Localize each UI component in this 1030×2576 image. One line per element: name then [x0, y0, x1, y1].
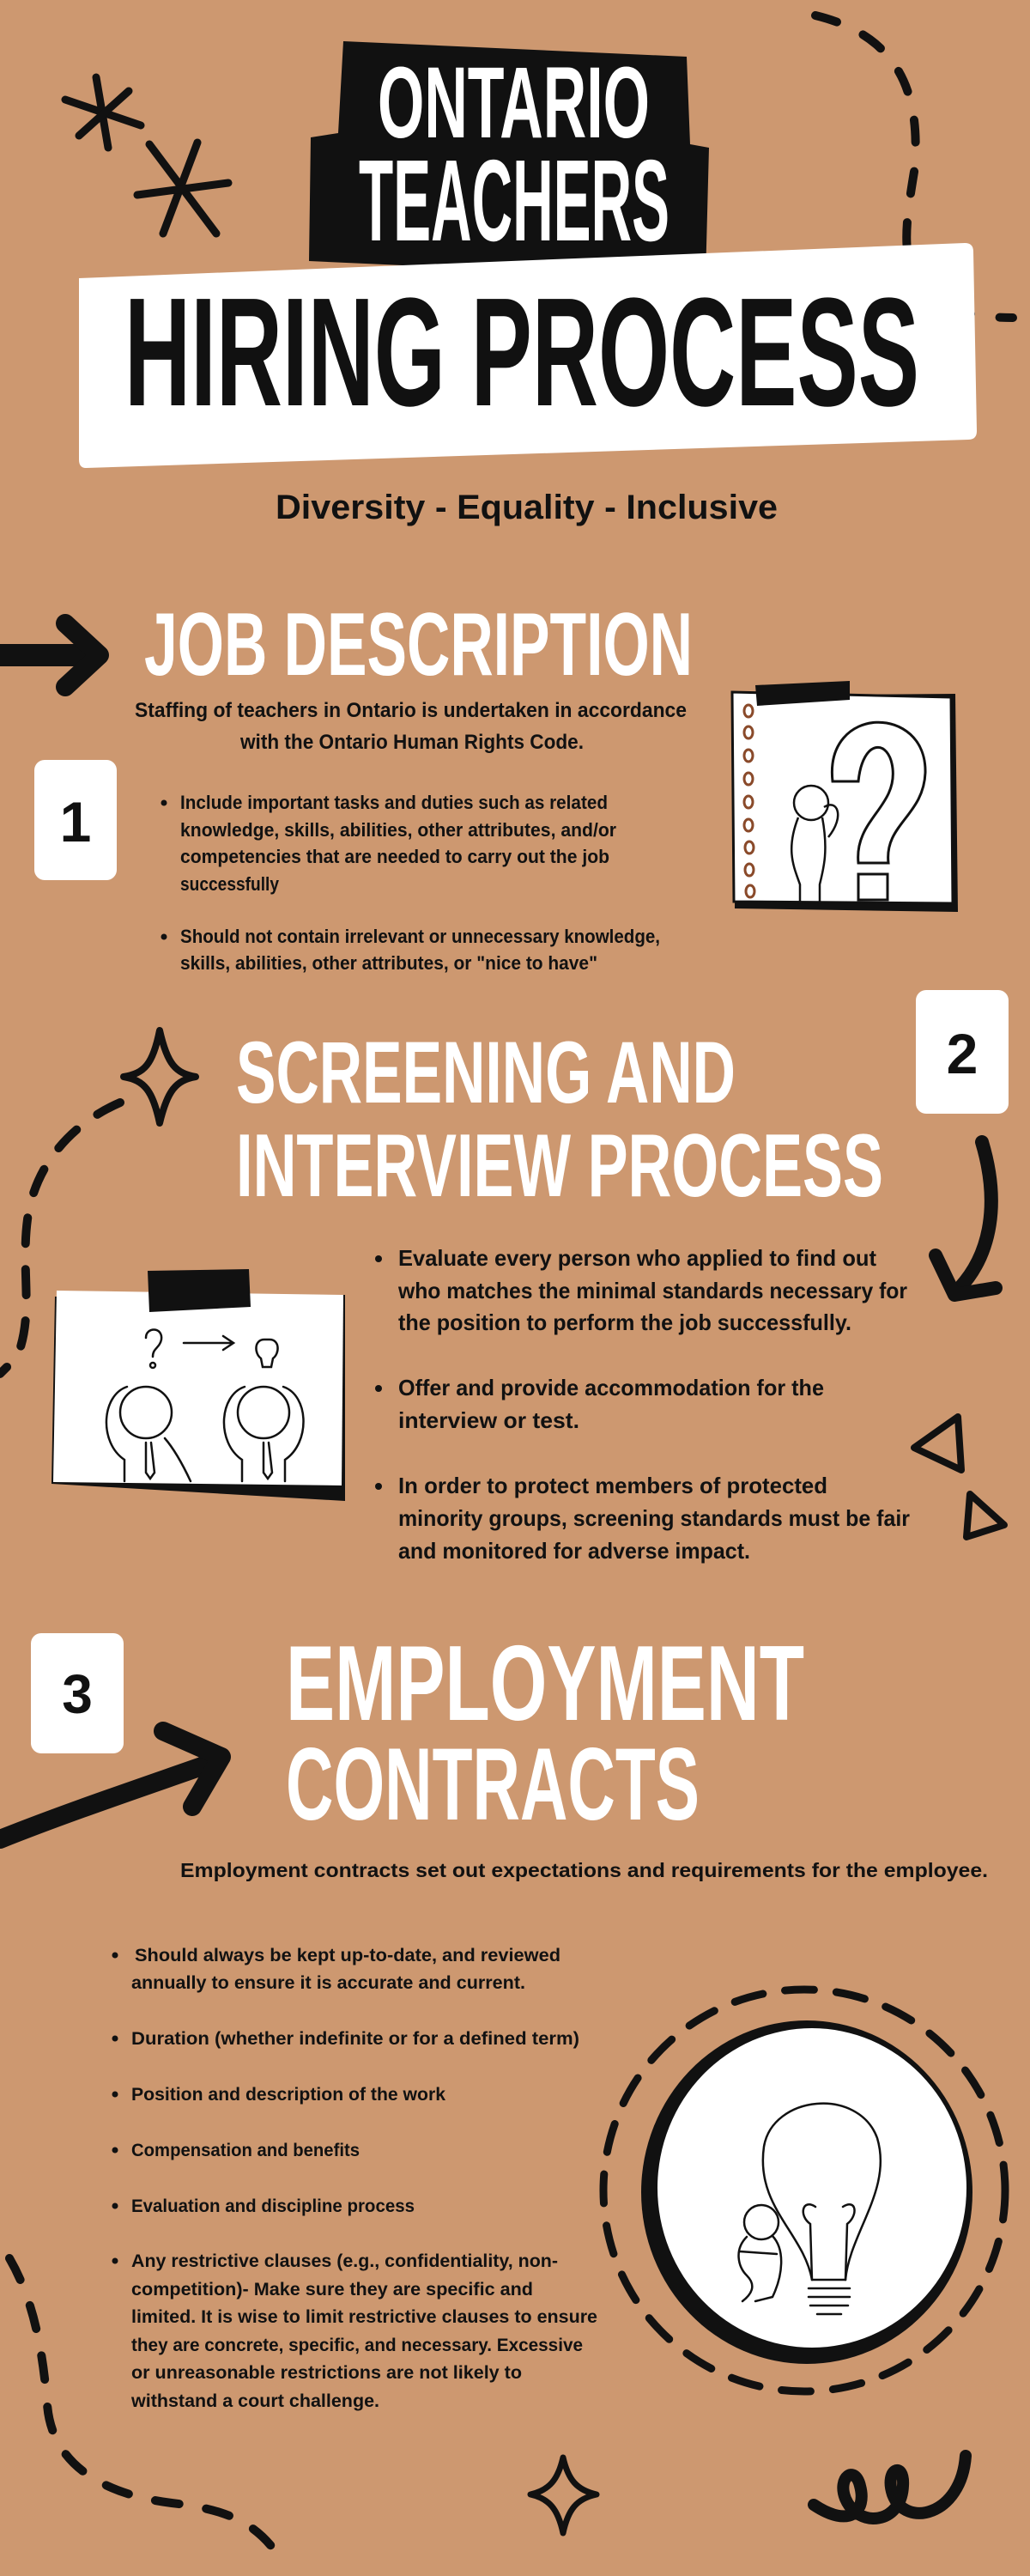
- heading: employment contracts: [286, 1625, 804, 1842]
- heading: employment contracts: EMPLOYMENT: [286, 1625, 804, 1743]
- bullets: section 3: Position and description of the work: [131, 2085, 445, 2105]
- text block: section 1 intro: Staffing of teachers in Ontario is undertaken in accordance: [135, 699, 687, 722]
- bullets: section 1: knowledge, skills, abilities, other attributes, and/or: [180, 819, 616, 841]
- number box 2: [916, 990, 1009, 1114]
- heading: job description: JOB DESCRIPTION: [144, 595, 693, 695]
- icon: light bulb circle: [603, 1990, 1005, 2391]
- bullets: section 2: Evaluate every person who applied to find out: [398, 1245, 876, 1271]
- bullets: section 2: Offer and provide accommodation for the: [398, 1375, 824, 1400]
- icon: sparkle bottom: [530, 2458, 597, 2533]
- number box 3: 3: [62, 1663, 93, 1725]
- bullets: section 3: Any restrictive clauses (e.g., confidentiality, non-: [131, 2251, 558, 2271]
- dashed curve top right: [815, 15, 1013, 318]
- icon: asterisk top left: [65, 77, 141, 148]
- number box 2: 2: [947, 1022, 978, 1085]
- bullets: section 3: Should always be kept up-to-date, and reviewed: [135, 1946, 560, 1965]
- icon: asterisk second: [137, 143, 228, 234]
- icon: notepad with question mark: [732, 681, 958, 912]
- bullets: section 3: limited. It is wise to limit restrictive clauses to ensure: [131, 2307, 597, 2327]
- bullets: section 2: minority groups, screening standards must be fair: [398, 1505, 910, 1531]
- heading: screening and interview process: SCREENING AND: [236, 1024, 736, 1121]
- bullets: section 1: skills, abilities, other attributes, or "nice to have": [180, 952, 597, 974]
- subtitle: Diversity - Equality - Inclusive: [276, 489, 778, 526]
- bullets: section 3: they are concrete, specific, and necessary. Excessive: [131, 2336, 583, 2355]
- icon: squiggle bottom right: [814, 2456, 966, 2518]
- bullets: section 2: In order to protect members of protected: [398, 1473, 827, 1498]
- dashed curve left section 2: [0, 1103, 120, 1374]
- bullets: section 1: competencies that are needed to carry out the job: [180, 846, 609, 867]
- title: black box ONTARIO TEACHERS: TEACHERS: [359, 136, 670, 265]
- bullets: section 1: successfully: [180, 873, 280, 895]
- bullets: section 2: interview or test.: [398, 1407, 579, 1433]
- bullets: section 3: Evaluation and discipline process: [131, 2196, 415, 2216]
- bullets: section 2: and monitored for adverse impact.: [398, 1538, 750, 1564]
- bullets: section 3: Compensation and benefits: [131, 2141, 360, 2160]
- arrow: curved down section 2: [936, 1142, 996, 1295]
- text block: section 1 intro: [135, 699, 687, 754]
- bullets: section 3: or unreasonable restrictions are not likely to: [131, 2363, 522, 2383]
- arrow: section 3: [0, 1731, 221, 1839]
- number box 1: 1: [60, 790, 91, 854]
- bullets: section 1: [161, 792, 660, 974]
- bullets: section 3: annually to ensure it is accurate and current.: [131, 1973, 525, 1993]
- arrow: section 1: [0, 623, 100, 687]
- bullets: section 3: withstand a court challenge.: [130, 2391, 379, 2411]
- bullets: section 2: who matches the minimal standards necessary for: [397, 1278, 907, 1303]
- bullets: section 3: [112, 1946, 597, 2411]
- text block: section 3 intro: Employment contracts set out expectations and requirements for the employee.: [180, 1859, 988, 1881]
- title: black box ONTARIO TEACHERS: [309, 41, 709, 279]
- number box 1: [34, 760, 117, 880]
- text block: section 1 intro: with the Ontario Human Rights Code.: [239, 731, 584, 754]
- bullets: section 2: [375, 1245, 910, 1564]
- icon: sparkle section 2: [124, 1030, 196, 1123]
- title: black box ONTARIO TEACHERS: ONTARIO: [378, 46, 650, 160]
- bullets: section 1: Include important tasks and duties such as related: [180, 792, 608, 813]
- icon: triangles: [914, 1417, 1004, 1537]
- icon: notepad with two figures: [52, 1269, 345, 1501]
- bullets: section 3: Duration (whether indefinite or for a defined term): [131, 2029, 579, 2049]
- bullets: section 1: Should not contain irrelevant or unnecessary knowledge,: [180, 926, 660, 947]
- heading: screening and interview process: [236, 1024, 883, 1216]
- title: white box HIRING PROCESS: [79, 243, 977, 468]
- number box 3: [31, 1633, 124, 1753]
- dashed curve bottom left: [9, 2258, 283, 2563]
- heading: employment contracts: CONTRACTS: [286, 1727, 700, 1842]
- bullets: section 3: competition)- Make sure they are specific and: [131, 2280, 533, 2300]
- bullets: section 2: the position to perform the job successfully.: [398, 1309, 851, 1335]
